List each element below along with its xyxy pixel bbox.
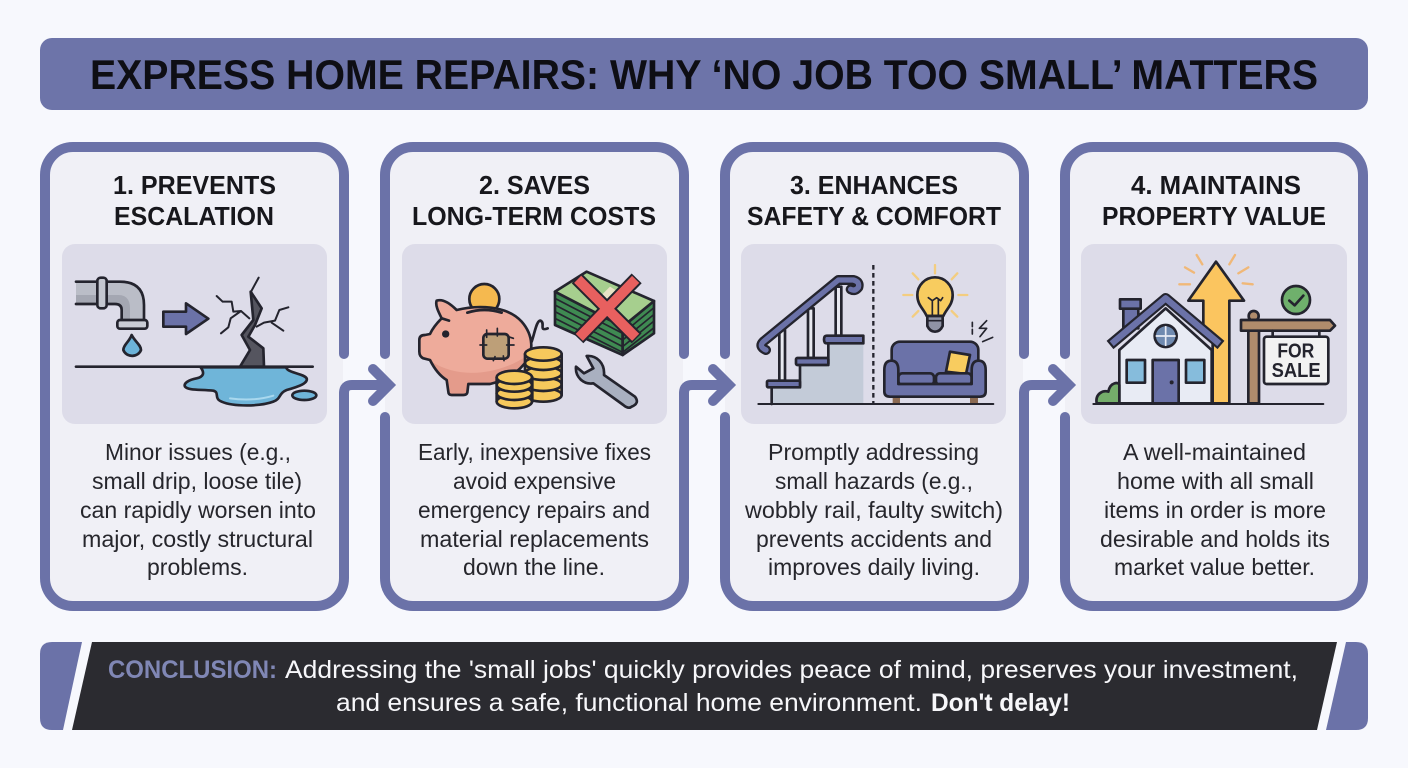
icon: sofa	[884, 321, 993, 404]
icon: light bulb	[903, 265, 967, 332]
conclusion text: CONCLUSION:	[108, 656, 277, 684]
icon: for sale sign: SALE	[1272, 360, 1321, 382]
image tile: house, rising arrow and sale sign	[1081, 244, 1347, 424]
icon: for sale sign: FOR	[1277, 341, 1315, 363]
panel: saves long-term costs	[385, 147, 684, 606]
heading: prevents escalation	[113, 170, 276, 231]
text block: saves long-term costs: Early, inexpensive fixes	[418, 439, 651, 465]
text block: prevents escalation: problems.	[147, 554, 248, 580]
icon: house	[1096, 298, 1221, 403]
text block: enhances safety and comfort: improves daily living.	[768, 554, 980, 580]
conclusion text: and ensures a safe, functional home environment.	[336, 689, 922, 717]
heading: maintains property value	[1102, 170, 1326, 231]
image tile: leaking pipe to structural damage	[62, 244, 327, 424]
text block: saves long-term costs: down the line.	[463, 554, 605, 580]
title banner: EXPRESS HOME REPAIRS: WHY ‘NO JOB TOO SMALL’ MATTERS	[90, 51, 1318, 98]
text block: prevents escalation: can rapidly worsen into	[80, 497, 316, 523]
heading: enhances safety and comfort: 3. ENHANCES	[790, 170, 958, 200]
panel: enhances safety and comfort	[725, 147, 1024, 606]
text block: saves long-term costs	[418, 439, 651, 580]
icon: for sale sign	[1241, 311, 1335, 403]
divider: dashed line	[870, 265, 877, 403]
heading: saves long-term costs: 2. SAVES	[479, 170, 590, 200]
icon: staircase with handrail	[761, 280, 863, 404]
heading: prevents escalation: 1. PREVENTS	[113, 170, 276, 200]
text block: maintains property value: items in order is more	[1104, 497, 1326, 523]
text block: maintains property value: desirable and holds its	[1100, 526, 1330, 552]
icon: patched piggy bank	[419, 284, 548, 395]
text block: prevents escalation: Minor issues (e.g.,	[105, 439, 291, 465]
text block: enhances safety and comfort: prevents accidents and	[756, 526, 992, 552]
arrow: panel 2 to panel 3	[684, 369, 729, 401]
image tile: piggy bank, cash and wrench	[402, 244, 667, 424]
text block: prevents escalation: small drip, loose tile)	[92, 468, 302, 494]
text block: saves long-term costs: avoid expensive	[453, 468, 616, 494]
text block: enhances safety and comfort: Promptly addressing	[768, 439, 979, 465]
conclusion banner	[40, 642, 1368, 730]
heading: enhances safety and comfort	[747, 170, 1001, 231]
text block: saves long-term costs: emergency repairs and	[418, 497, 650, 523]
panel: prevents escalation	[45, 147, 344, 606]
heading: prevents escalation: ESCALATION	[114, 201, 274, 231]
icon: green check badge	[1282, 286, 1310, 314]
icon: coin stacks	[497, 347, 562, 408]
text block: maintains property value: market value better.	[1114, 554, 1315, 580]
text block: maintains property value	[1100, 439, 1330, 580]
text block: maintains property value: A well-maintained	[1123, 439, 1306, 465]
text block: prevents escalation: major, costly structural	[82, 526, 313, 552]
image tile: staircase, bulb and sofa	[741, 244, 1006, 424]
icon: rising value arrow	[1179, 255, 1253, 403]
heading: saves long-term costs: LONG-TERM COSTS	[412, 201, 656, 231]
text block: prevents escalation	[80, 439, 316, 580]
heading: maintains property value: 4. MAINTAINS	[1131, 170, 1301, 200]
icon: wrench	[576, 356, 637, 408]
conclusion text: Don't delay!	[931, 689, 1070, 717]
conclusion text: Addressing the 'small jobs' quickly provides peace of mind, preserves your investment,	[285, 656, 1298, 684]
arrow: small leak becomes large problem	[163, 303, 208, 334]
title banner	[40, 38, 1368, 110]
conclusion text	[108, 656, 1298, 717]
icon: dripping pipe	[76, 278, 147, 356]
heading: enhances safety and comfort: SAFETY & COMFORT	[747, 201, 1001, 231]
heading: maintains property value: PROPERTY VALUE	[1102, 201, 1326, 231]
panel: maintains property value	[1065, 147, 1363, 606]
arrow: panel 3 to panel 4	[1024, 369, 1069, 401]
floor line	[758, 401, 993, 407]
text block: maintains property value: home with all small	[1117, 468, 1314, 494]
text block: enhances safety and comfort: small hazards (e.g.,	[775, 468, 973, 494]
icon: crack and water puddle	[76, 278, 316, 405]
text block: saves long-term costs: material replacements	[420, 526, 649, 552]
floor line	[1093, 401, 1323, 407]
text block: enhances safety and comfort	[744, 439, 1003, 580]
heading: saves long-term costs	[412, 170, 656, 231]
icon: crossed-out cash stack	[555, 272, 654, 355]
arrow: panel 1 to panel 2	[344, 369, 389, 401]
text block: enhances safety and comfort: wobbly rail, faulty switch)	[744, 497, 1003, 523]
